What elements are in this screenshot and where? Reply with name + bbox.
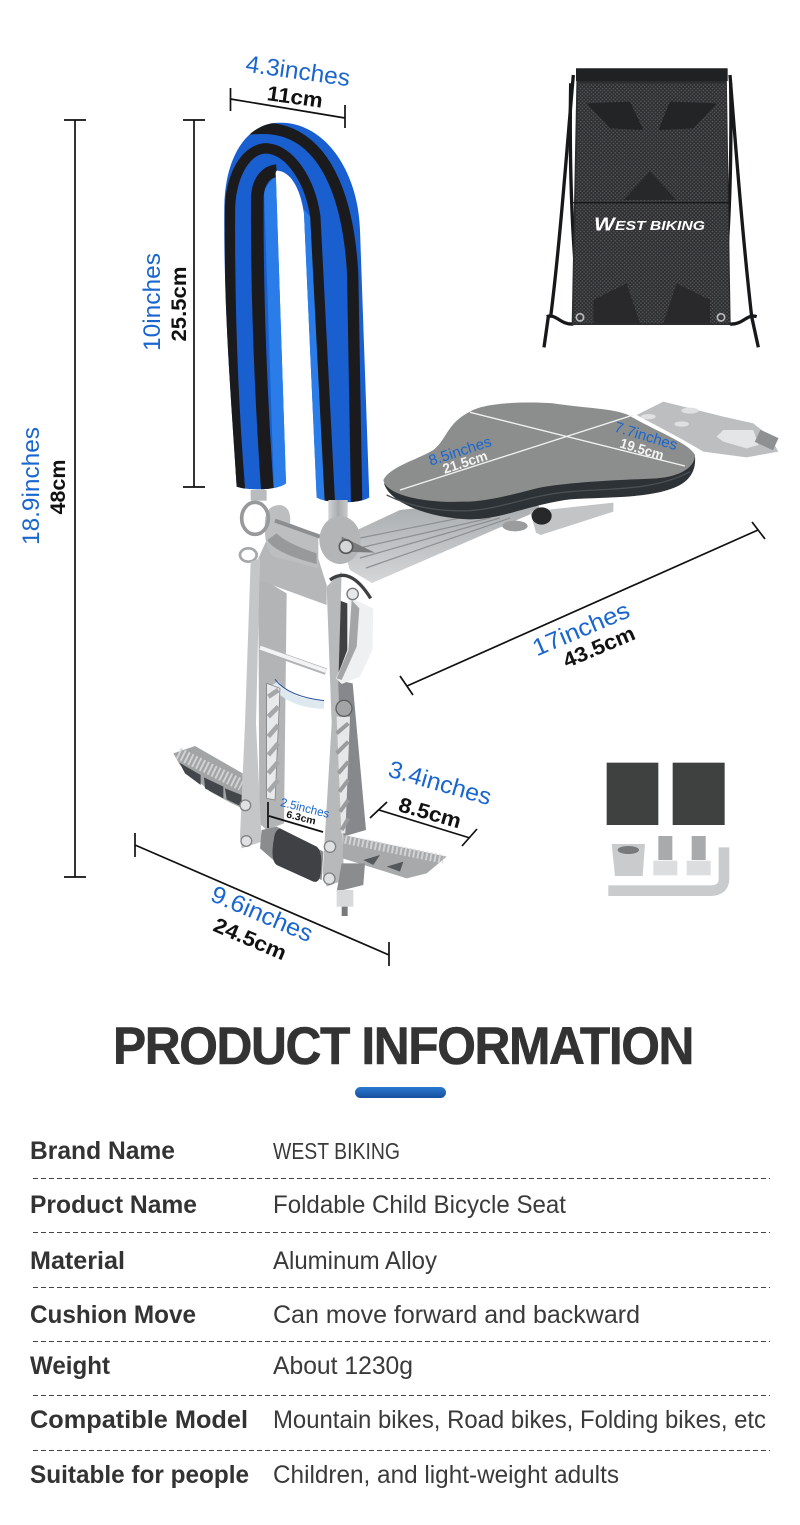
row: weight [30, 1352, 413, 1380]
drawstring bag [544, 68, 758, 347]
section title: PRODUCT INFORMATION [113, 1017, 693, 1076]
row: material: Aluminum Alloy [273, 1247, 437, 1275]
label 48cm: 48cm [47, 460, 70, 514]
lower ring [240, 548, 257, 562]
gear arc [330, 575, 371, 598]
cushion underside [384, 457, 695, 519]
row: material [30, 1247, 437, 1275]
seat beam [340, 495, 540, 583]
handle width dimension [230, 88, 345, 128]
bag top hem [576, 68, 728, 81]
black stripes [230, 128, 357, 505]
row: product name [30, 1191, 566, 1219]
row: brand name: WEST BIKING [273, 1138, 400, 1164]
axle bolt [339, 540, 353, 553]
pin bracket [337, 863, 365, 892]
bag logo text: EST BIKING [615, 218, 705, 233]
hardware accessories [607, 763, 725, 891]
seat clamp [530, 503, 613, 535]
rear panel [258, 577, 287, 830]
seat length line [470, 412, 685, 466]
quick release lever [336, 597, 373, 684]
label 11cm: 11cm [266, 82, 324, 113]
row: compatible model: Mountain bikes, Road bikes, Folding bikes, etc [273, 1406, 766, 1434]
label 17 inches: 17inches [529, 597, 634, 662]
row: weight: Weight [30, 1352, 111, 1380]
label 43.5cm: 43.5cm [560, 622, 639, 673]
rear bolt [717, 430, 758, 448]
title accent bar [355, 1087, 446, 1098]
seat label 21.5cm: 21.5cm [441, 447, 489, 477]
lever pivot [347, 588, 358, 600]
rivet nut [612, 844, 645, 876]
seat label 8.5 inches: 8.5inches [427, 433, 494, 470]
left clamp [265, 505, 318, 568]
right footrest underside [363, 855, 403, 872]
right footrest ridges [345, 839, 443, 859]
row: material: Material [30, 1247, 125, 1275]
row: compatible model: Compatible Model [30, 1406, 248, 1434]
bag logo: W [594, 214, 616, 235]
label 24.5cm: 24.5cm [210, 914, 290, 965]
bolt 1 head [653, 861, 677, 875]
footrest width dimension [135, 833, 389, 966]
bag body [572, 68, 731, 325]
seat cushion [383, 402, 779, 535]
cushion-to-arm dimension [370, 802, 477, 846]
left footrest underside [179, 763, 242, 807]
bag shading centre [623, 172, 677, 200]
rubber pad 1 [607, 763, 658, 825]
bag shading left [587, 102, 643, 130]
bolt 2 thread [692, 836, 706, 860]
lever slot [337, 600, 347, 677]
cross rod [260, 648, 326, 672]
bag shading right [658, 102, 717, 130]
clamp cavity [267, 533, 317, 564]
beam length dimension [400, 522, 765, 695]
foam tube blue body [220, 120, 373, 507]
pin tip [342, 907, 348, 916]
strap stitching [275, 679, 324, 701]
handle height dimension [183, 120, 205, 487]
inner frame dimension [268, 802, 323, 832]
left ladder notches [268, 690, 278, 792]
cushion groove [387, 472, 690, 511]
seat width line [400, 415, 633, 490]
row: cushion move: Cushion Move [30, 1301, 196, 1329]
bag lower shading [593, 283, 640, 323]
row: cushion move: Can move forward and backward [273, 1301, 640, 1329]
left footrest [173, 746, 243, 808]
inner stripe [257, 171, 277, 490]
axle tip [342, 537, 375, 553]
left adjust holes [267, 683, 280, 800]
rear rail [337, 680, 366, 837]
top block [258, 540, 327, 605]
outer stripe [245, 128, 357, 505]
seat rear bracket [637, 402, 778, 457]
roller [272, 828, 321, 882]
row: suitable for people: Suitable for people [30, 1461, 249, 1489]
bracket rivet 1 [641, 414, 656, 419]
label 4.3 inches: 4.3inches [244, 51, 352, 92]
bag lower shading right [663, 283, 710, 323]
foam highlight [264, 174, 286, 488]
right arm [323, 572, 344, 887]
row: product name: Foldable Child Bicycle Seat [273, 1191, 566, 1219]
row: brand name: Brand Name [30, 1137, 175, 1165]
foam right highlight [302, 207, 325, 505]
lever shading [337, 600, 359, 680]
allen key [608, 847, 724, 891]
row: brand name [30, 1137, 400, 1165]
bag grommet right [717, 314, 725, 321]
right clamp [319, 516, 361, 564]
adjuster nut [336, 700, 352, 716]
label 6.3cm: 6.3cm [285, 810, 317, 827]
label 25.5cm: 25.5cm [168, 266, 191, 342]
aluminium beam [340, 495, 540, 583]
beam ridges [350, 516, 510, 568]
cushion top [383, 403, 695, 502]
bag grommet left [576, 314, 584, 321]
rubber pad 2 [673, 763, 725, 825]
label 8.5cm: 8.5cm [396, 794, 464, 833]
clamp bolt [502, 521, 528, 531]
middle stripe [230, 148, 330, 505]
row dividers [33, 1178, 770, 1450]
right ladder notches [337, 723, 348, 830]
label 9.6 inches: 9.6inches [207, 881, 317, 948]
handle stem left [251, 490, 267, 501]
rear bolt tip [755, 430, 779, 450]
label 18.9 inches: 18.9inches [18, 427, 45, 545]
handle stem right [328, 500, 348, 527]
bag mesh texture [573, 83, 729, 323]
left pivot ring [242, 502, 268, 534]
height dimension [64, 120, 86, 877]
bottom pin [337, 890, 353, 907]
bracket rivet 3 [681, 408, 699, 414]
right ladder [337, 717, 350, 833]
seat label 19.5cm: 19.5cm [618, 435, 666, 463]
left arm [240, 558, 262, 848]
left footrest ridges [178, 753, 242, 785]
bag pocket seam [573, 201, 729, 205]
rivet nut hole [618, 846, 639, 854]
bag straps [544, 75, 758, 347]
right footrest [343, 835, 447, 878]
cross rod highlight [260, 648, 326, 671]
row: cushion move [30, 1301, 640, 1329]
product information table [30, 1137, 770, 1489]
folding frame [173, 490, 447, 916]
bracket rivet 2 [674, 421, 689, 427]
label 2.5 inches: 2.5inches [279, 795, 331, 821]
label 10 inches: 10inches [139, 253, 166, 351]
clamp hole [532, 507, 552, 525]
seat label 7.7 inches: 7.7inches [612, 419, 679, 454]
rivets [240, 800, 336, 884]
row: suitable for people [30, 1461, 619, 1489]
dimension lines [64, 88, 765, 966]
roller mount [260, 827, 323, 880]
row: weight: About 1230g [273, 1352, 413, 1380]
bolt 2 head [687, 861, 711, 875]
axle [275, 521, 320, 537]
row: compatible model [30, 1406, 766, 1434]
row: suitable for people: Children, and light-weight adults [273, 1461, 619, 1489]
label 3.4 inches: 3.4inches [385, 756, 495, 811]
foam handle [220, 120, 373, 507]
bolt 1 thread [658, 836, 672, 860]
strap [275, 683, 324, 705]
row: product name: Product Name [30, 1191, 197, 1219]
